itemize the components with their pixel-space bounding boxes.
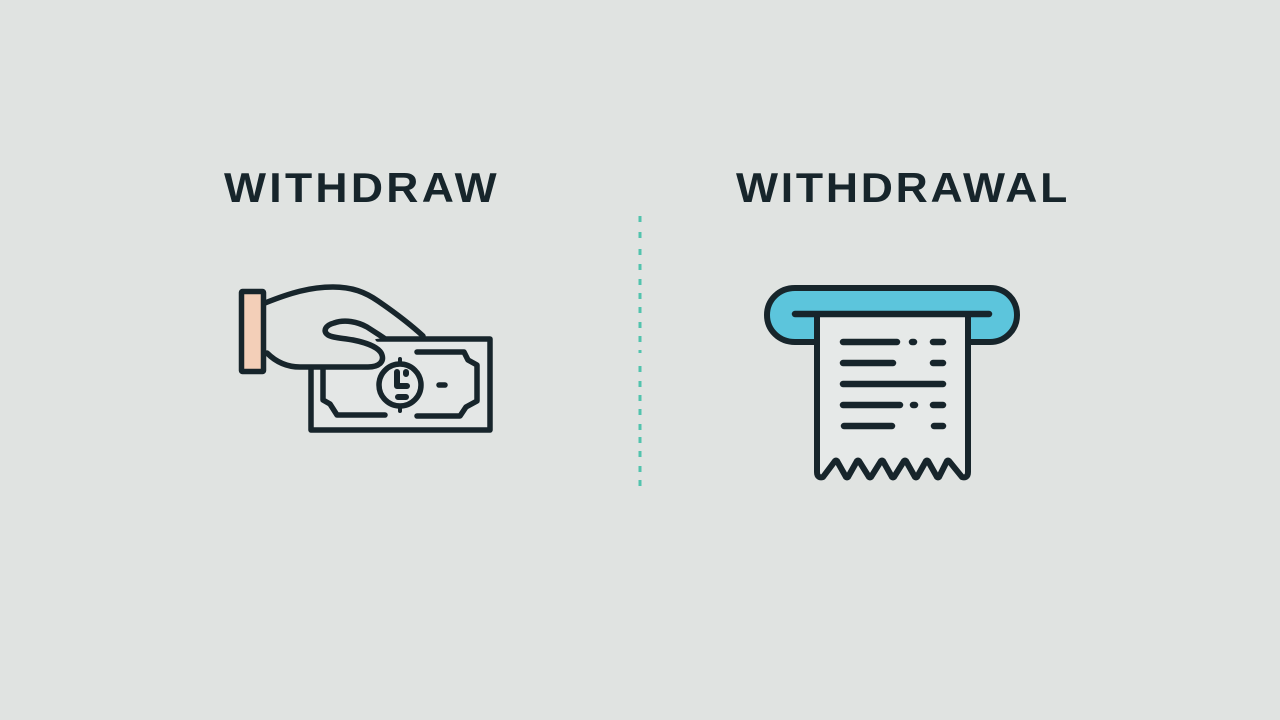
icon: receipt coming out of slot xyxy=(767,288,1017,478)
paper receipt xyxy=(817,314,968,478)
icon: hand holding banknote xyxy=(242,287,490,430)
banknote outline xyxy=(311,339,490,430)
shirt cuff xyxy=(242,292,264,372)
slot housing xyxy=(767,288,1017,342)
banknote dot xyxy=(439,382,445,388)
coin with dollar sign xyxy=(379,359,421,411)
heading: withdraw: WITHDRAW xyxy=(224,165,500,212)
divider: dotted vertical line xyxy=(638,216,642,486)
receipt text lines xyxy=(843,342,943,426)
slot opening bar xyxy=(795,311,989,317)
hand xyxy=(265,287,423,336)
heading: withdrawal: WITHDRAWAL xyxy=(736,165,1070,212)
banknote inner border xyxy=(323,352,477,416)
